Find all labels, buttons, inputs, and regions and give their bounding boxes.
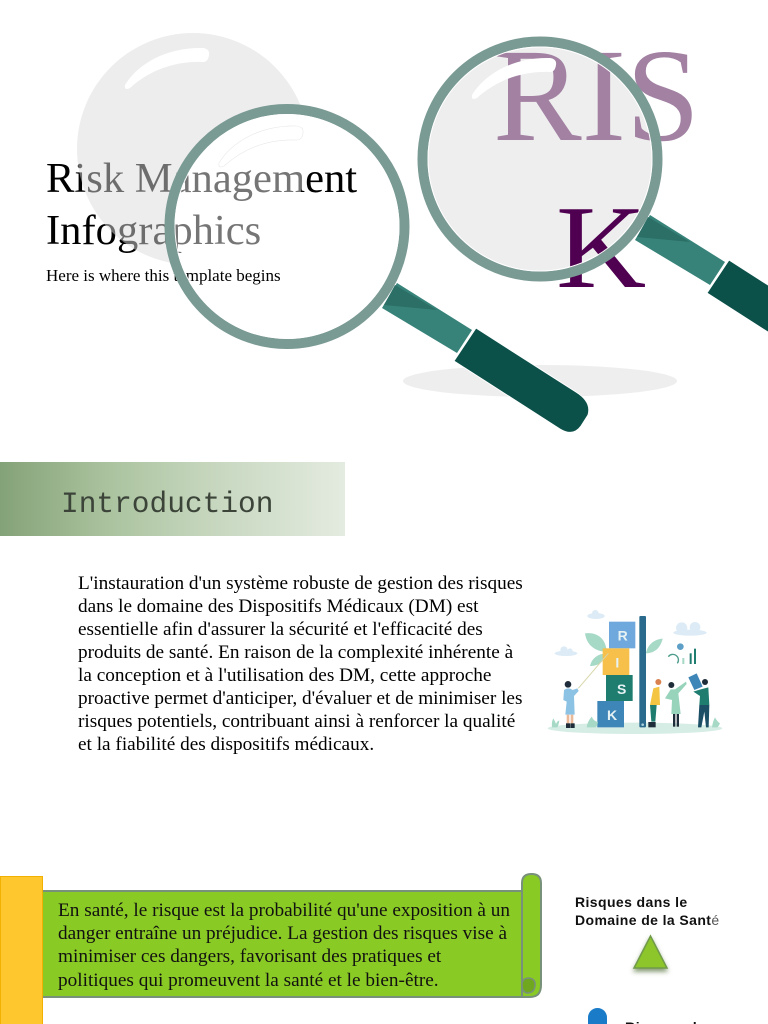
yellow side bar	[0, 876, 43, 1024]
intro paragraph	[78, 572, 523, 754]
green scroll callout	[43, 873, 542, 998]
illustration: people around RISK blocks: S	[617, 681, 626, 697]
illustration: people around RISK blocks	[548, 610, 722, 734]
intro paragraph: L'instauration d'un système robuste de gestion des risques	[78, 572, 523, 594]
scroll text: danger entraîne un préjudice. La gestion des risques vise à	[58, 923, 507, 944]
heading: health domain risks: Domaine de la Santé	[575, 912, 720, 928]
icon: green triangle	[631, 934, 670, 975]
intro paragraph: produits de santé. En raison de la complexité inhérente à	[78, 642, 513, 662]
scroll text: minimiser ces dangers, favorisant des pratiques et	[58, 946, 441, 967]
title and subtitle: Risk Management	[46, 155, 357, 202]
illustration: people around RISK blocks: R	[618, 628, 628, 644]
title and subtitle	[46, 155, 357, 285]
intro paragraph: la conception et à l'utilisation des DM, cette approche	[78, 664, 491, 686]
intro paragraph: dans le domaine des Dispositifs Médicaux (DM) est	[78, 596, 478, 616]
right magnifying glass with RISK lettering	[422, 21, 768, 364]
scroll text: politiques qui promeuvent la santé et le bien-être.	[58, 970, 439, 991]
section banner: Introduction: Introduction	[61, 487, 273, 521]
heading: health domain risks: Risques dans le	[575, 894, 688, 910]
left magnifying glass	[170, 109, 589, 432]
intro paragraph: risques potentiels, contribuant ainsi à renforcer la qualité	[78, 710, 515, 732]
ground shadow ellipse	[403, 365, 677, 397]
title and subtitle: Infographics	[46, 207, 261, 254]
intro paragraph: essentielle afin d'assurer la sécurité et l'efficacité des	[78, 618, 483, 640]
illustration: people around RISK blocks: K	[607, 707, 617, 723]
section banner: Introduction	[0, 462, 345, 536]
scroll text: En santé, le risque est la probabilité qu'une exposition à un	[58, 900, 510, 920]
scroll text	[58, 900, 510, 991]
RIS letters: RIS	[493, 21, 700, 169]
faded glass circle over the title	[77, 33, 309, 265]
icon: blue marker	[588, 1008, 607, 1024]
intro paragraph: et la fiabilité des dispositifs médicaux.	[78, 734, 374, 754]
K letter: K	[556, 182, 646, 313]
title and subtitle: Here is where this template begins	[46, 266, 281, 285]
intro paragraph: proactive permet d'anticiper, d'évaluer et de minimiser les	[78, 688, 522, 708]
heading: health domain risks	[575, 894, 720, 928]
illustration: people around RISK blocks: I	[615, 654, 619, 670]
